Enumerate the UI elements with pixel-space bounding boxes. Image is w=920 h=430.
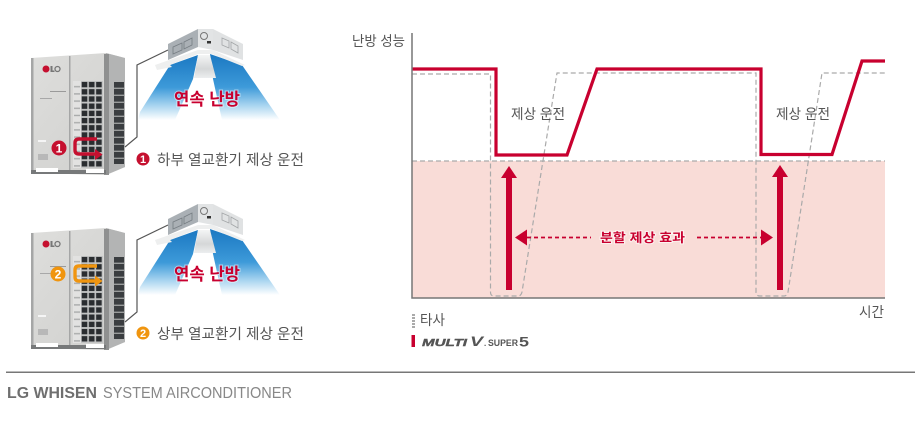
footer divider and title xyxy=(6,372,915,402)
effect area xyxy=(412,161,885,298)
axes xyxy=(412,33,885,298)
icon: indoor cassette with warm air 1 xyxy=(125,29,280,147)
label: upper heat exchanger defrost operation: 상부 열교환기 제상 운전 xyxy=(157,326,304,343)
heading: continuous heating 1: 연속 난방 xyxy=(174,90,240,109)
y axis label: 난방 성능 xyxy=(352,33,405,49)
legend item: Multi V Super 5: V xyxy=(470,333,485,349)
legend item: Multi V Super 5: 5 xyxy=(519,334,529,350)
icon: badge 2 on unit: 2 xyxy=(55,268,62,282)
threshold dashed line xyxy=(412,160,885,162)
heading: continuous heating 2: 연속 난방 xyxy=(174,265,240,284)
legend item: competitor: 타사 xyxy=(420,312,445,328)
icon: badge 2 on unit xyxy=(50,266,66,282)
legend item: Multi V Super 5: MULTI xyxy=(422,337,469,349)
arrow: lower circulation xyxy=(75,139,102,160)
arrow: partial defrost effect span xyxy=(515,230,773,246)
legend xyxy=(412,312,529,350)
annotation: defrost operation 2: 제상 운전 xyxy=(776,106,830,122)
footer divider and title: LG WHISEN xyxy=(7,385,97,402)
icon: badge 1 on unit xyxy=(52,140,66,156)
arrow: upward 1 xyxy=(501,166,517,290)
arrow: upper circulation xyxy=(75,266,102,286)
legend item: Multi V Super 5: . xyxy=(484,339,486,348)
legend item: Multi V Super 5: SUPER xyxy=(488,338,518,348)
x axis label: 시간 xyxy=(859,304,884,320)
annotation: defrost operation 1: 제상 운전 xyxy=(511,106,565,122)
label: lower heat exchanger defrost operation: 1 xyxy=(140,154,146,166)
arrow: upward 2 xyxy=(772,165,788,290)
icon: indoor cassette with warm air 2 xyxy=(125,204,280,322)
annotation: partial defrost effect: 분할 제상 효과 xyxy=(600,230,686,245)
panel: upper heat exchanger defrost xyxy=(31,204,304,350)
panel: lower heat exchanger defrost xyxy=(31,29,304,175)
icon: badge 1 on unit: 1 xyxy=(56,142,63,156)
series: Multi V Super 5 line xyxy=(412,61,885,155)
icon: outdoor unit 2 xyxy=(31,228,125,350)
series: competitor dashed line xyxy=(412,73,885,296)
footer divider and title: SYSTEM AIRCONDITIONER xyxy=(103,385,292,402)
chart: heating capacity over time xyxy=(352,33,885,320)
legend item: Multi V Super 5 xyxy=(412,333,529,350)
label: upper heat exchanger defrost operation: 2 xyxy=(140,328,146,340)
label: lower heat exchanger defrost operation: 하부 열교환기 제상 운전 xyxy=(157,152,304,169)
icon: outdoor unit 1 xyxy=(31,53,125,175)
